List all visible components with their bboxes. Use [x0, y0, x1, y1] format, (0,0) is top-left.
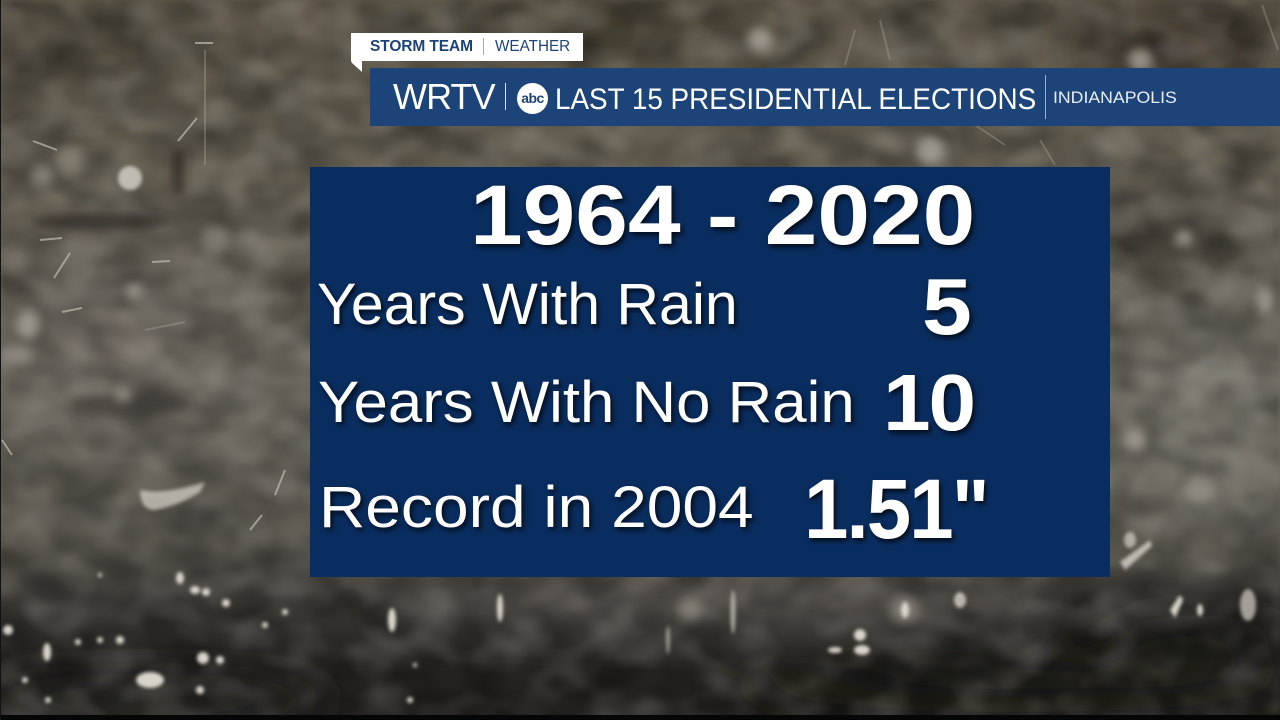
stat row: record in 2004: 1.51" [804, 462, 988, 556]
callout: Storm Team Weather: STORM TEAM [370, 38, 473, 55]
callout: Storm Team Weather: WEATHER [495, 38, 570, 55]
icon: abc logo: abc [521, 90, 544, 106]
heading: year range: 1964 - 2020 [470, 168, 975, 262]
stat row: years with rain: Years With Rain [317, 272, 738, 337]
stat row: years with no rain [318, 358, 978, 447]
stat row: years with no rain: Years With No Rain [318, 370, 855, 435]
banner: WRTV last 15 presidential elections: LAST 15 PRESIDENTIAL ELECTIONS [555, 83, 1036, 116]
stat row: years with no rain: 10 [883, 358, 974, 447]
panel: statistics [310, 167, 1110, 577]
banner: WRTV last 15 presidential elections: WRTV [393, 76, 495, 117]
stat row: record in 2004 [319, 462, 988, 556]
stat row: years with rain [317, 262, 974, 351]
callout: Storm Team Weather [351, 33, 583, 72]
stat row: years with rain: 5 [922, 262, 972, 351]
banner: WRTV last 15 presidential elections: INDIANAPOLIS [1053, 88, 1177, 107]
icon: abc logo [517, 83, 548, 114]
stat row: record in 2004: Record in 2004 [319, 475, 754, 540]
banner: WRTV last 15 presidential elections [370, 68, 1280, 126]
